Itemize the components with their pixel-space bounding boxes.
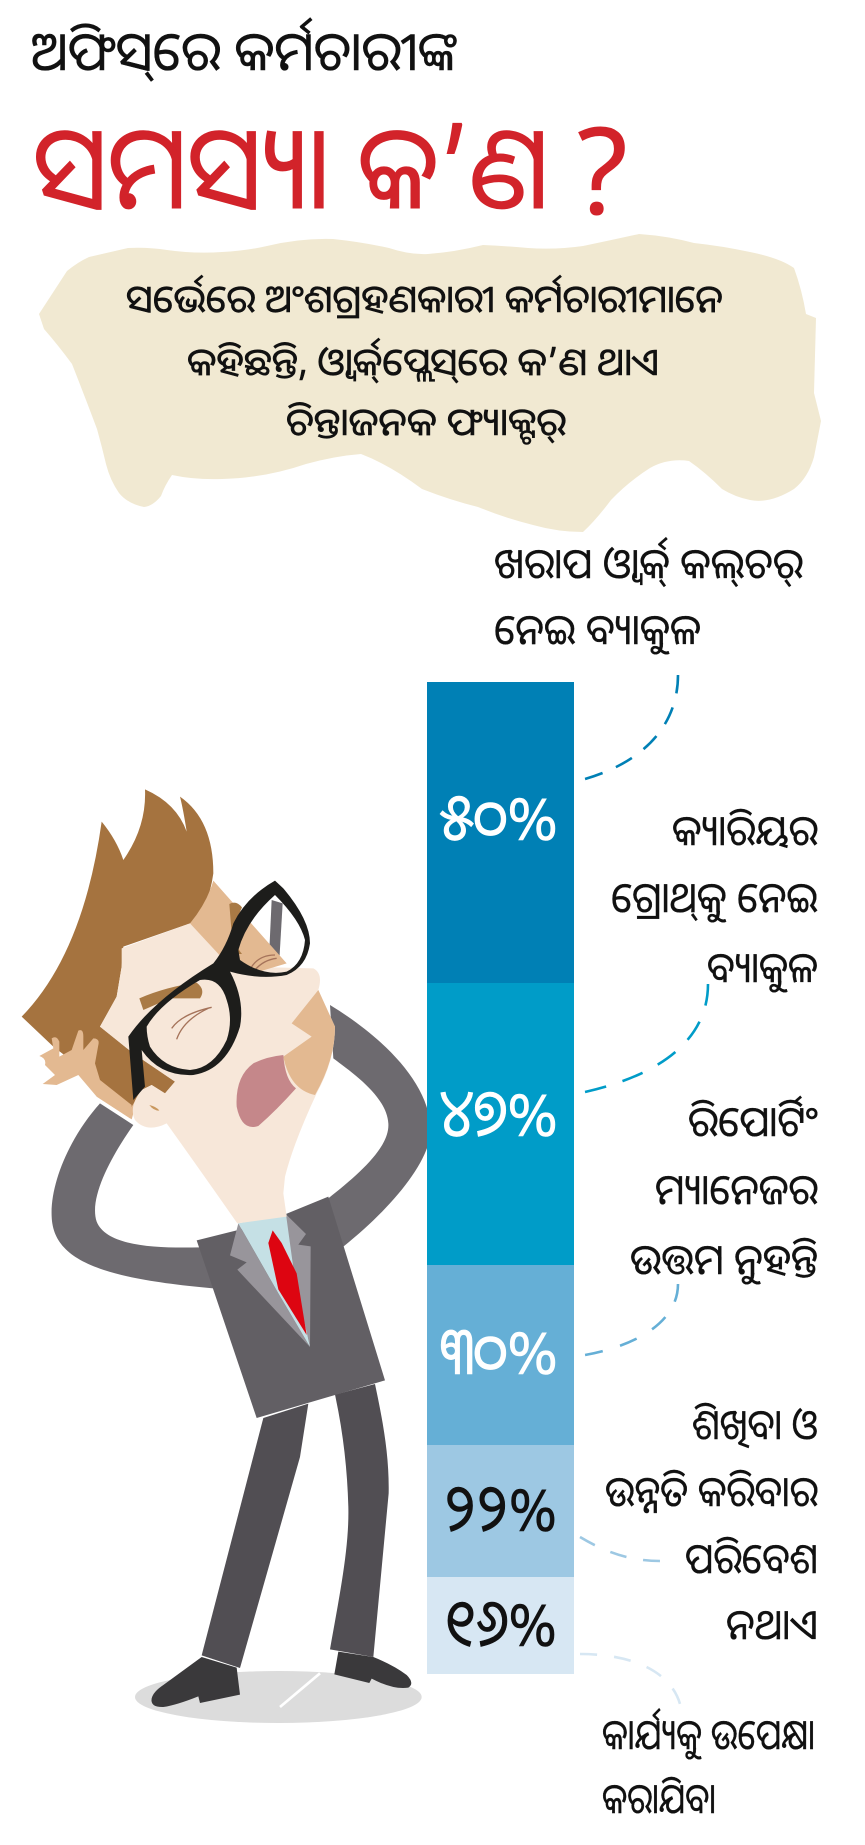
label: 22% learning environment: ଉନ୍ନତି କରିବାର — [605, 1462, 818, 1519]
label: 22% learning environment — [605, 1395, 818, 1652]
value 50%: ୫୦% — [439, 770, 558, 860]
glasses — [128, 881, 310, 1100]
connector: 50% — [585, 675, 678, 779]
forehead shading — [190, 881, 287, 973]
intro text line 1: ସର୍ଭେରେ ଅଂଶଗ୍ରହଣକାରୀ କର୍ମଚାରୀମାନେ — [126, 272, 723, 324]
label: 30% reporting manager: ମ୍ୟାନେଜର — [655, 1160, 818, 1217]
right arm — [328, 1005, 431, 1247]
bar segment 30% — [427, 1265, 574, 1445]
panel: percentage stacked bar — [427, 682, 574, 1674]
right shoe — [334, 1652, 411, 1688]
left arm — [52, 1103, 213, 1288]
ear detail — [149, 1105, 159, 1111]
panel: intro blob — [39, 234, 821, 532]
intro text line 3: ଚିନ୍ତାଜନକ ଫ୍ୟାକ୍ଟର୍ — [286, 395, 566, 447]
eye creases — [172, 955, 277, 1039]
far eyebrow — [229, 903, 242, 954]
bar segment 47% — [427, 983, 574, 1265]
bar segment 50% — [427, 682, 574, 983]
jacket — [197, 1197, 385, 1418]
far arm bar behind lens — [269, 900, 283, 960]
label: 16% work ignored: କାର୍ଯ୍ୟକୁ ଉପେକ୍ଷା — [602, 1705, 815, 1762]
cheek shading — [283, 990, 335, 1095]
hand fingers — [39, 1030, 132, 1118]
label: 30% reporting manager: ଉତ୍ତମ ନୁହନ୍ତି — [630, 1230, 818, 1287]
label: 22% learning environment: ଶିଖିବା ଓ — [692, 1395, 818, 1452]
label: 50% bad work culture: ନେଇ ବ୍ୟାକୁଳ — [494, 600, 701, 657]
label: 50% bad work culture: ଖରାପ ଓ୍ବାର୍କ୍ କଲ୍‌ଚର୍ — [494, 534, 803, 591]
value 22%: ୨୨% — [444, 1461, 557, 1551]
label: 16% work ignored: କରାଯିବା — [602, 1769, 716, 1826]
illustration: stressed office worker — [22, 789, 431, 1723]
connector: 16% — [580, 1654, 680, 1704]
label: 50% bad work culture — [494, 534, 803, 657]
hair — [22, 789, 213, 1107]
label: 47% career growth: ବ୍ୟାକୁଳ — [707, 938, 818, 995]
connector: 22% — [580, 1537, 660, 1561]
value 30%: ୩୦% — [440, 1304, 558, 1394]
label: 47% career growth — [611, 801, 818, 995]
floor shadow — [135, 1671, 422, 1723]
title line 2: ସମସ୍ୟା କ’ଣ — [33, 84, 549, 242]
connector: 47% — [585, 984, 708, 1092]
label: 30% reporting manager: ରିପୋର୍ଟିଂ — [688, 1092, 818, 1149]
title line 1: ଅଫିସ୍‌ରେ କର୍ମଚାରୀଙ୍କ — [31, 12, 457, 86]
connector: 30% — [585, 1284, 678, 1355]
label: 47% career growth: ଗ୍ରୋଥ୍‌କୁ ନେଇ — [611, 868, 818, 925]
right leg — [330, 1384, 389, 1657]
tie — [268, 1230, 307, 1335]
shirt — [238, 1214, 310, 1347]
value 16%: ୧୬% — [444, 1576, 557, 1666]
bar segment 22% — [427, 1445, 574, 1577]
face — [100, 923, 335, 1223]
value 47%: ୪୭% — [440, 1066, 558, 1156]
label: 22% learning environment: ପରିବେଶ — [685, 1529, 818, 1586]
open mouth — [237, 1055, 296, 1127]
bar segment 16% — [427, 1577, 574, 1674]
left shoe — [151, 1657, 240, 1707]
label: 30% reporting manager — [630, 1092, 818, 1287]
hand in hair (wrist under hair line) — [97, 1060, 140, 1119]
label: 22% learning environment: ନଥାଏ — [726, 1595, 818, 1652]
label: 16% work ignored — [602, 1705, 815, 1826]
left leg — [202, 1404, 308, 1668]
near eyebrow — [139, 983, 202, 1010]
lapels — [230, 1214, 311, 1347]
label: 47% career growth: କ୍ୟାରିୟର — [672, 801, 818, 858]
title line 2: ? — [571, 87, 632, 250]
intro text line 2: କହିଛନ୍ତି, ଓ୍ବାର୍କ୍‌ପ୍ଲେସ୍‌ରେ କ’ଣ ଥାଏ — [187, 335, 659, 387]
